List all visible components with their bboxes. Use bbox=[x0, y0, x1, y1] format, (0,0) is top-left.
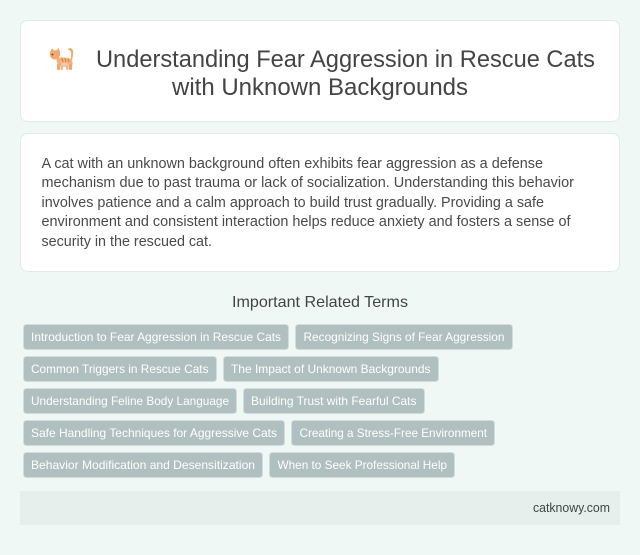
text block: description: A cat with an unknown background often exhibits fear aggression as a defense bbox=[42, 156, 543, 172]
tag: recognizing signs: Recognizing Signs of Fear Aggression bbox=[304, 330, 504, 344]
tag: common triggers bbox=[24, 356, 216, 382]
text block: description bbox=[42, 156, 574, 250]
title: Understanding Fear Aggression in Rescue Cats bbox=[96, 46, 595, 73]
panel: description card bbox=[20, 134, 620, 272]
tag: body language bbox=[24, 388, 236, 414]
heading: important related terms: Important Related Terms bbox=[232, 294, 408, 311]
text block: description: security in the rescued cat. bbox=[42, 234, 212, 250]
text block: description: mechanism due to past trauma or lack of socialization. Understanding this behavior bbox=[42, 175, 574, 191]
tag: building trust bbox=[244, 388, 424, 414]
tag: safe handling: Safe Handling Techniques for Aggressive Cats bbox=[31, 426, 277, 440]
tag: professional help: When to Seek Professional Help bbox=[278, 458, 447, 472]
tag: introduction: Introduction to Fear Aggression in Rescue Cats bbox=[31, 330, 281, 344]
icon: orange cat bbox=[50, 48, 73, 70]
tag: behavior modification bbox=[24, 452, 262, 478]
tag: body language: Understanding Feline Body Language bbox=[31, 394, 229, 408]
tag: unknown backgrounds bbox=[224, 356, 438, 382]
text block: description: involves patience and a calm approach to build trust gradually. Providing a safe bbox=[42, 195, 544, 211]
panel: title card bbox=[20, 20, 620, 122]
tag: behavior modification: Behavior Modification and Desensitization bbox=[31, 458, 255, 472]
title bbox=[96, 46, 595, 101]
tag: unknown backgrounds: The Impact of Unknown Backgrounds bbox=[231, 362, 430, 376]
tag: stress-free environment bbox=[292, 420, 494, 446]
tag: recognizing signs bbox=[296, 324, 512, 350]
tag: introduction bbox=[24, 324, 288, 350]
footer: catknowy.com bbox=[533, 500, 610, 515]
title: with Unknown Backgrounds bbox=[171, 74, 468, 101]
tag: professional help bbox=[270, 452, 454, 478]
text block: description: environment and consistent interaction helps reduce anxiety and fosters a sense of bbox=[42, 214, 571, 230]
tag: safe handling bbox=[24, 420, 284, 446]
footer bbox=[20, 491, 620, 525]
tag list bbox=[24, 324, 512, 478]
tag: stress-free environment: Creating a Stress-Free Environment bbox=[300, 426, 488, 440]
tag: building trust: Building Trust with Fearful Cats bbox=[251, 394, 416, 408]
tag: common triggers: Common Triggers in Rescue Cats bbox=[31, 362, 208, 376]
